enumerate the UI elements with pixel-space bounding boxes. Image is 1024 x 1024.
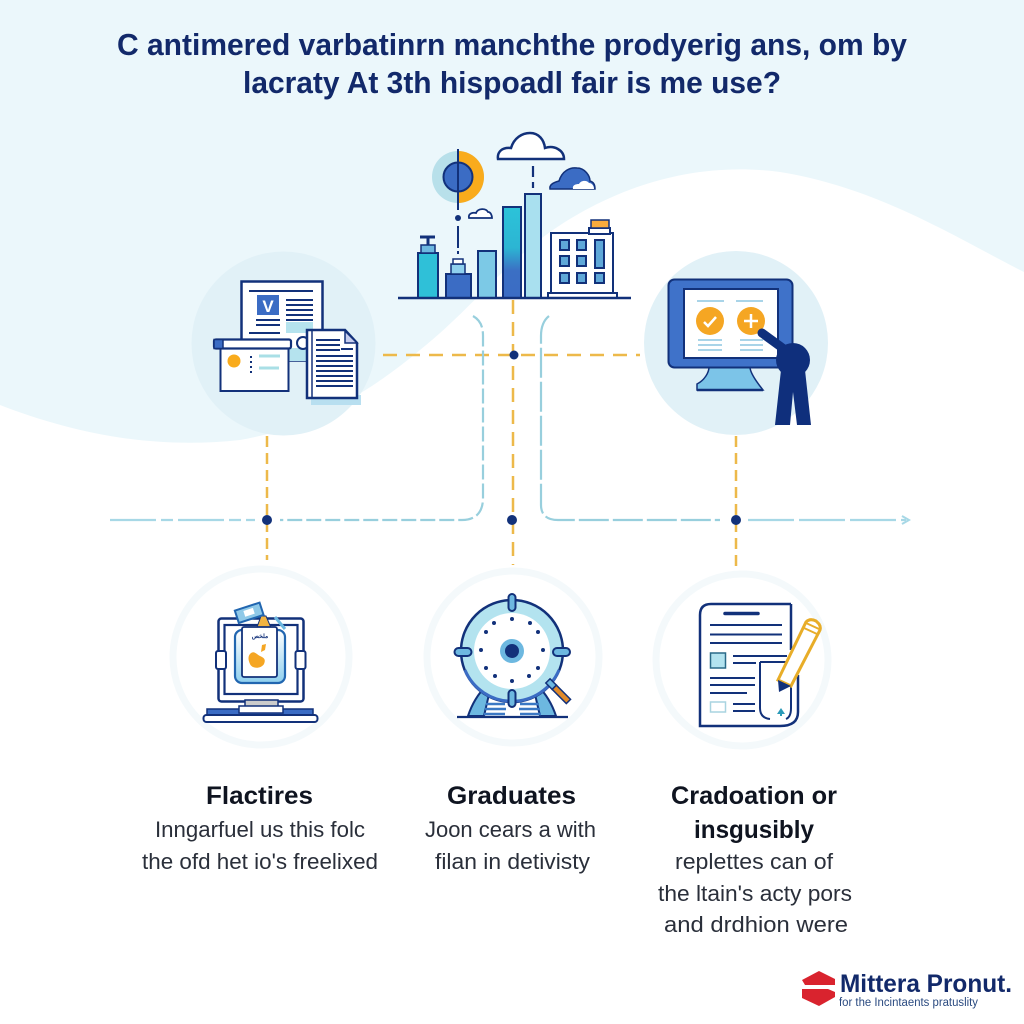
connector lines xyxy=(110,300,909,567)
icon: documents in circle xyxy=(192,252,376,436)
text block: column three: Cradoation or xyxy=(671,782,837,810)
icon: documents in circle: V xyxy=(262,297,274,316)
text block: column two: filan in detivisty xyxy=(435,849,590,874)
text block: column three: the ltain's acty pors xyxy=(658,881,852,906)
logo: for the Incintaents pratuslity xyxy=(839,997,978,1009)
text block: column one: the ofd het io's freelixed xyxy=(142,849,378,874)
icon: city skyline with bars xyxy=(398,133,631,298)
text block: column three: insgusibly xyxy=(694,816,814,844)
icon: wheel gauge xyxy=(427,571,599,743)
logo: Mittera Pronut. xyxy=(840,970,1012,998)
logo xyxy=(802,970,1012,1009)
text block: column one: Flactires xyxy=(206,782,313,810)
text block: column three xyxy=(658,782,852,937)
background wave xyxy=(0,0,1024,443)
title: C antimered varbatinrn manchthe prodyerig ans, om by xyxy=(117,27,908,62)
icon: document with pencil xyxy=(656,574,828,746)
icon: computer with clipboard xyxy=(173,569,349,745)
icon: computer with clipboard: ملخص xyxy=(252,633,268,640)
text block: column three: and drdhion were xyxy=(664,912,848,937)
text block: column three: replettes can of xyxy=(675,849,834,874)
text block: column one xyxy=(142,782,378,874)
text block: column two: Graduates xyxy=(447,782,576,810)
text block: column two: Joon cears a with xyxy=(425,817,596,842)
title: lacraty At 3th hispoadl fair is me use? xyxy=(243,65,781,100)
title xyxy=(117,27,908,100)
icon: monitor with presenter in circle xyxy=(644,251,828,435)
text block: column one: Inngarfuel us this folc xyxy=(155,817,365,842)
text block: column two xyxy=(425,782,596,874)
